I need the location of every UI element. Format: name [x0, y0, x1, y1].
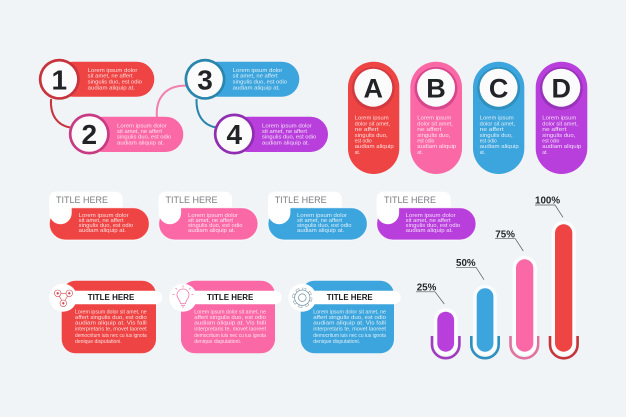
connector: 1 to 2: [51, 99, 70, 128]
box red: interpretaris te, movet laoreet: [75, 326, 147, 332]
box red: audiam aliquip at. Vis falli: [75, 321, 147, 327]
pill B: [410, 62, 462, 174]
title card purple: TITLE HERE: [384, 195, 436, 205]
panel: title cards: [49, 192, 476, 240]
box pink: [169, 281, 282, 353]
bar 25%: [416, 282, 459, 358]
step 2: audiam aliquip at.: [117, 140, 164, 146]
pill D: [536, 62, 587, 174]
pill A: est odio: [355, 138, 372, 144]
pill A: [348, 62, 399, 174]
step 4: singulis duo, est odio: [262, 135, 316, 141]
step 1: Lorem ipsum dolor: [88, 68, 138, 74]
pill D: est odio: [542, 138, 559, 144]
title card purple: audiam aliquip at.: [406, 228, 453, 234]
step 4: sit amet, ne affert: [262, 129, 308, 135]
box blue: Lorem ipsum dolor sit amet, ne: [313, 310, 386, 316]
step 3: Lorem ipsum dolor: [233, 68, 283, 74]
connector: 2 to 3: [157, 86, 187, 118]
pill B: Lorem ipsum: [417, 116, 452, 122]
chart: percentage bars: [416, 196, 578, 358]
bar 100%: [535, 196, 578, 358]
box pink: affert singulis duo, est odio: [194, 315, 266, 321]
title card blue: TITLE HERE: [275, 195, 327, 205]
pill C: Lorem ipsum: [480, 116, 514, 122]
title card pink: sit amet, ne affert: [188, 218, 234, 224]
panel: numbered steps: [39, 59, 328, 154]
step 3: sit amet, ne affert: [233, 74, 278, 80]
panel: icon boxes: [49, 281, 401, 353]
title card pink: TITLE HERE: [166, 195, 218, 205]
step 3: singulis duo, est odio: [233, 80, 287, 86]
title card blue: [268, 192, 367, 240]
title card pink: Lorem ipsum dolor: [188, 213, 238, 219]
title card purple: sit amet, ne affert: [406, 218, 451, 224]
bar 50%: 50%: [456, 258, 476, 269]
bar 75%: 75%: [495, 229, 515, 240]
pill B: audiam aliquip: [417, 144, 456, 150]
box red: denique disputationi.: [75, 339, 122, 345]
box blue: affert singulis duo, est odio: [313, 315, 386, 321]
title card red: TITLE HERE: [56, 195, 108, 205]
box blue: denique disputationi.: [313, 339, 360, 345]
pill A: at.: [355, 150, 360, 156]
step 2: 2: [82, 119, 97, 150]
bar 50%: [456, 258, 499, 358]
pill C: est odio: [480, 138, 497, 144]
step 4: Lorem ipsum dolor: [262, 123, 312, 129]
box red: affert singulis duo, est odio: [75, 315, 147, 321]
pill D: at.: [542, 150, 548, 156]
box blue: [288, 281, 401, 353]
title card pink: singulis duo, est odio: [188, 223, 242, 229]
pill A: singulis duo,: [355, 133, 388, 139]
connector: 3 to 4: [196, 99, 216, 128]
step 1: 1: [52, 64, 67, 96]
title card blue: audiam aliquip at.: [297, 228, 344, 234]
box pink: Lorem ipsum dolor sit amet, ne: [194, 310, 266, 316]
title card blue: singulis duo, est odio: [297, 223, 352, 229]
pill D: singulis duo,: [542, 133, 576, 139]
title card red: Lorem ipsum dolor: [79, 213, 129, 219]
step 3: [184, 59, 299, 100]
icon: network: [54, 290, 73, 307]
box blue: audiam aliquip at. Vis falli: [313, 321, 386, 327]
pill A: audiam aliquip: [355, 144, 394, 150]
title card purple: [377, 192, 476, 240]
pill A: Lorem ipsum: [355, 116, 389, 122]
box pink: denique disputationi.: [194, 339, 241, 345]
step 1: singulis duo, est odio: [88, 80, 142, 86]
step 4: [214, 114, 328, 154]
step 2: singulis duo, est odio: [117, 135, 171, 141]
pill D: Lorem ipsum: [542, 116, 577, 122]
pill B: at.: [417, 150, 423, 156]
box red: democritum iuis nec cu ius ignota: [75, 333, 147, 339]
pill C: dolor sit amet,: [480, 121, 516, 127]
title card purple: singulis duo, est odio: [406, 223, 460, 229]
bar 100%: 100%: [535, 196, 560, 206]
box pink: TITLE HERE: [207, 293, 254, 302]
title card red: sit amet, ne affert: [79, 218, 124, 224]
title card purple: Lorem ipsum dolor: [406, 213, 456, 219]
pill C: singulis duo,: [480, 133, 513, 139]
bar 75%: [495, 229, 538, 358]
pill C: C: [489, 74, 508, 104]
pill A: A: [364, 74, 383, 104]
box pink: democritum iuis nec cu ius ignota: [194, 333, 266, 339]
pill B: est odio: [417, 138, 434, 144]
pill C: ne affert: [480, 127, 504, 133]
pill B: B: [426, 74, 446, 104]
step 4: 4: [227, 119, 243, 150]
step 2: Lorem ipsum dolor: [117, 123, 167, 129]
icon: gear: [294, 289, 311, 307]
title card pink: audiam aliquip at.: [188, 228, 235, 234]
step 2: [69, 114, 183, 154]
title card red: singulis duo, est odio: [79, 223, 133, 229]
box blue: democritum iuis nec cu ius ignota: [313, 333, 386, 339]
step 4: audiam aliquip at.: [262, 140, 309, 146]
title card red: audiam aliquip at.: [79, 228, 126, 234]
pill B: dolor sit amet,: [417, 121, 453, 127]
box red: TITLE HERE: [88, 293, 135, 302]
title card pink: [159, 192, 258, 240]
step 2: sit amet, ne affert: [117, 129, 163, 135]
pill C: at.: [480, 150, 485, 156]
step 3: 3: [197, 64, 213, 96]
pill A: dolor sit amet,: [355, 121, 391, 127]
bar 25%: 25%: [417, 282, 437, 294]
box red: Lorem ipsum dolor sit amet, ne: [75, 310, 147, 316]
box blue: TITLE HERE: [327, 293, 373, 302]
pill B: ne affert: [417, 127, 442, 133]
step 1: [39, 59, 154, 100]
pill C: audiam aliquip: [480, 144, 519, 150]
title card blue: sit amet, ne affert: [297, 218, 343, 224]
panel: letter pills: [348, 62, 587, 174]
box red: [49, 281, 162, 353]
pill D: audiam aliquip: [542, 144, 581, 150]
pill B: singulis duo,: [417, 133, 451, 139]
box blue: interpretaris te, movet laoreet: [313, 326, 387, 332]
step 1: sit amet, ne affert: [88, 74, 133, 80]
step 1: audiam aliquip at.: [88, 85, 135, 91]
pill C: [473, 62, 524, 174]
pill A: ne affert: [355, 127, 379, 133]
title card blue: Lorem ipsum dolor: [297, 213, 347, 219]
pill D: D: [552, 74, 571, 104]
box pink: interpretaris te, movet laoreet: [194, 326, 266, 332]
box pink: audiam aliquip at. Vis falli: [194, 321, 266, 327]
icon: light bulb: [172, 286, 194, 307]
title card red: [49, 192, 149, 240]
pill D: dolor sit amet,: [542, 121, 578, 127]
pill D: ne affert: [542, 127, 567, 133]
step 3: audiam aliquip at.: [233, 85, 280, 91]
